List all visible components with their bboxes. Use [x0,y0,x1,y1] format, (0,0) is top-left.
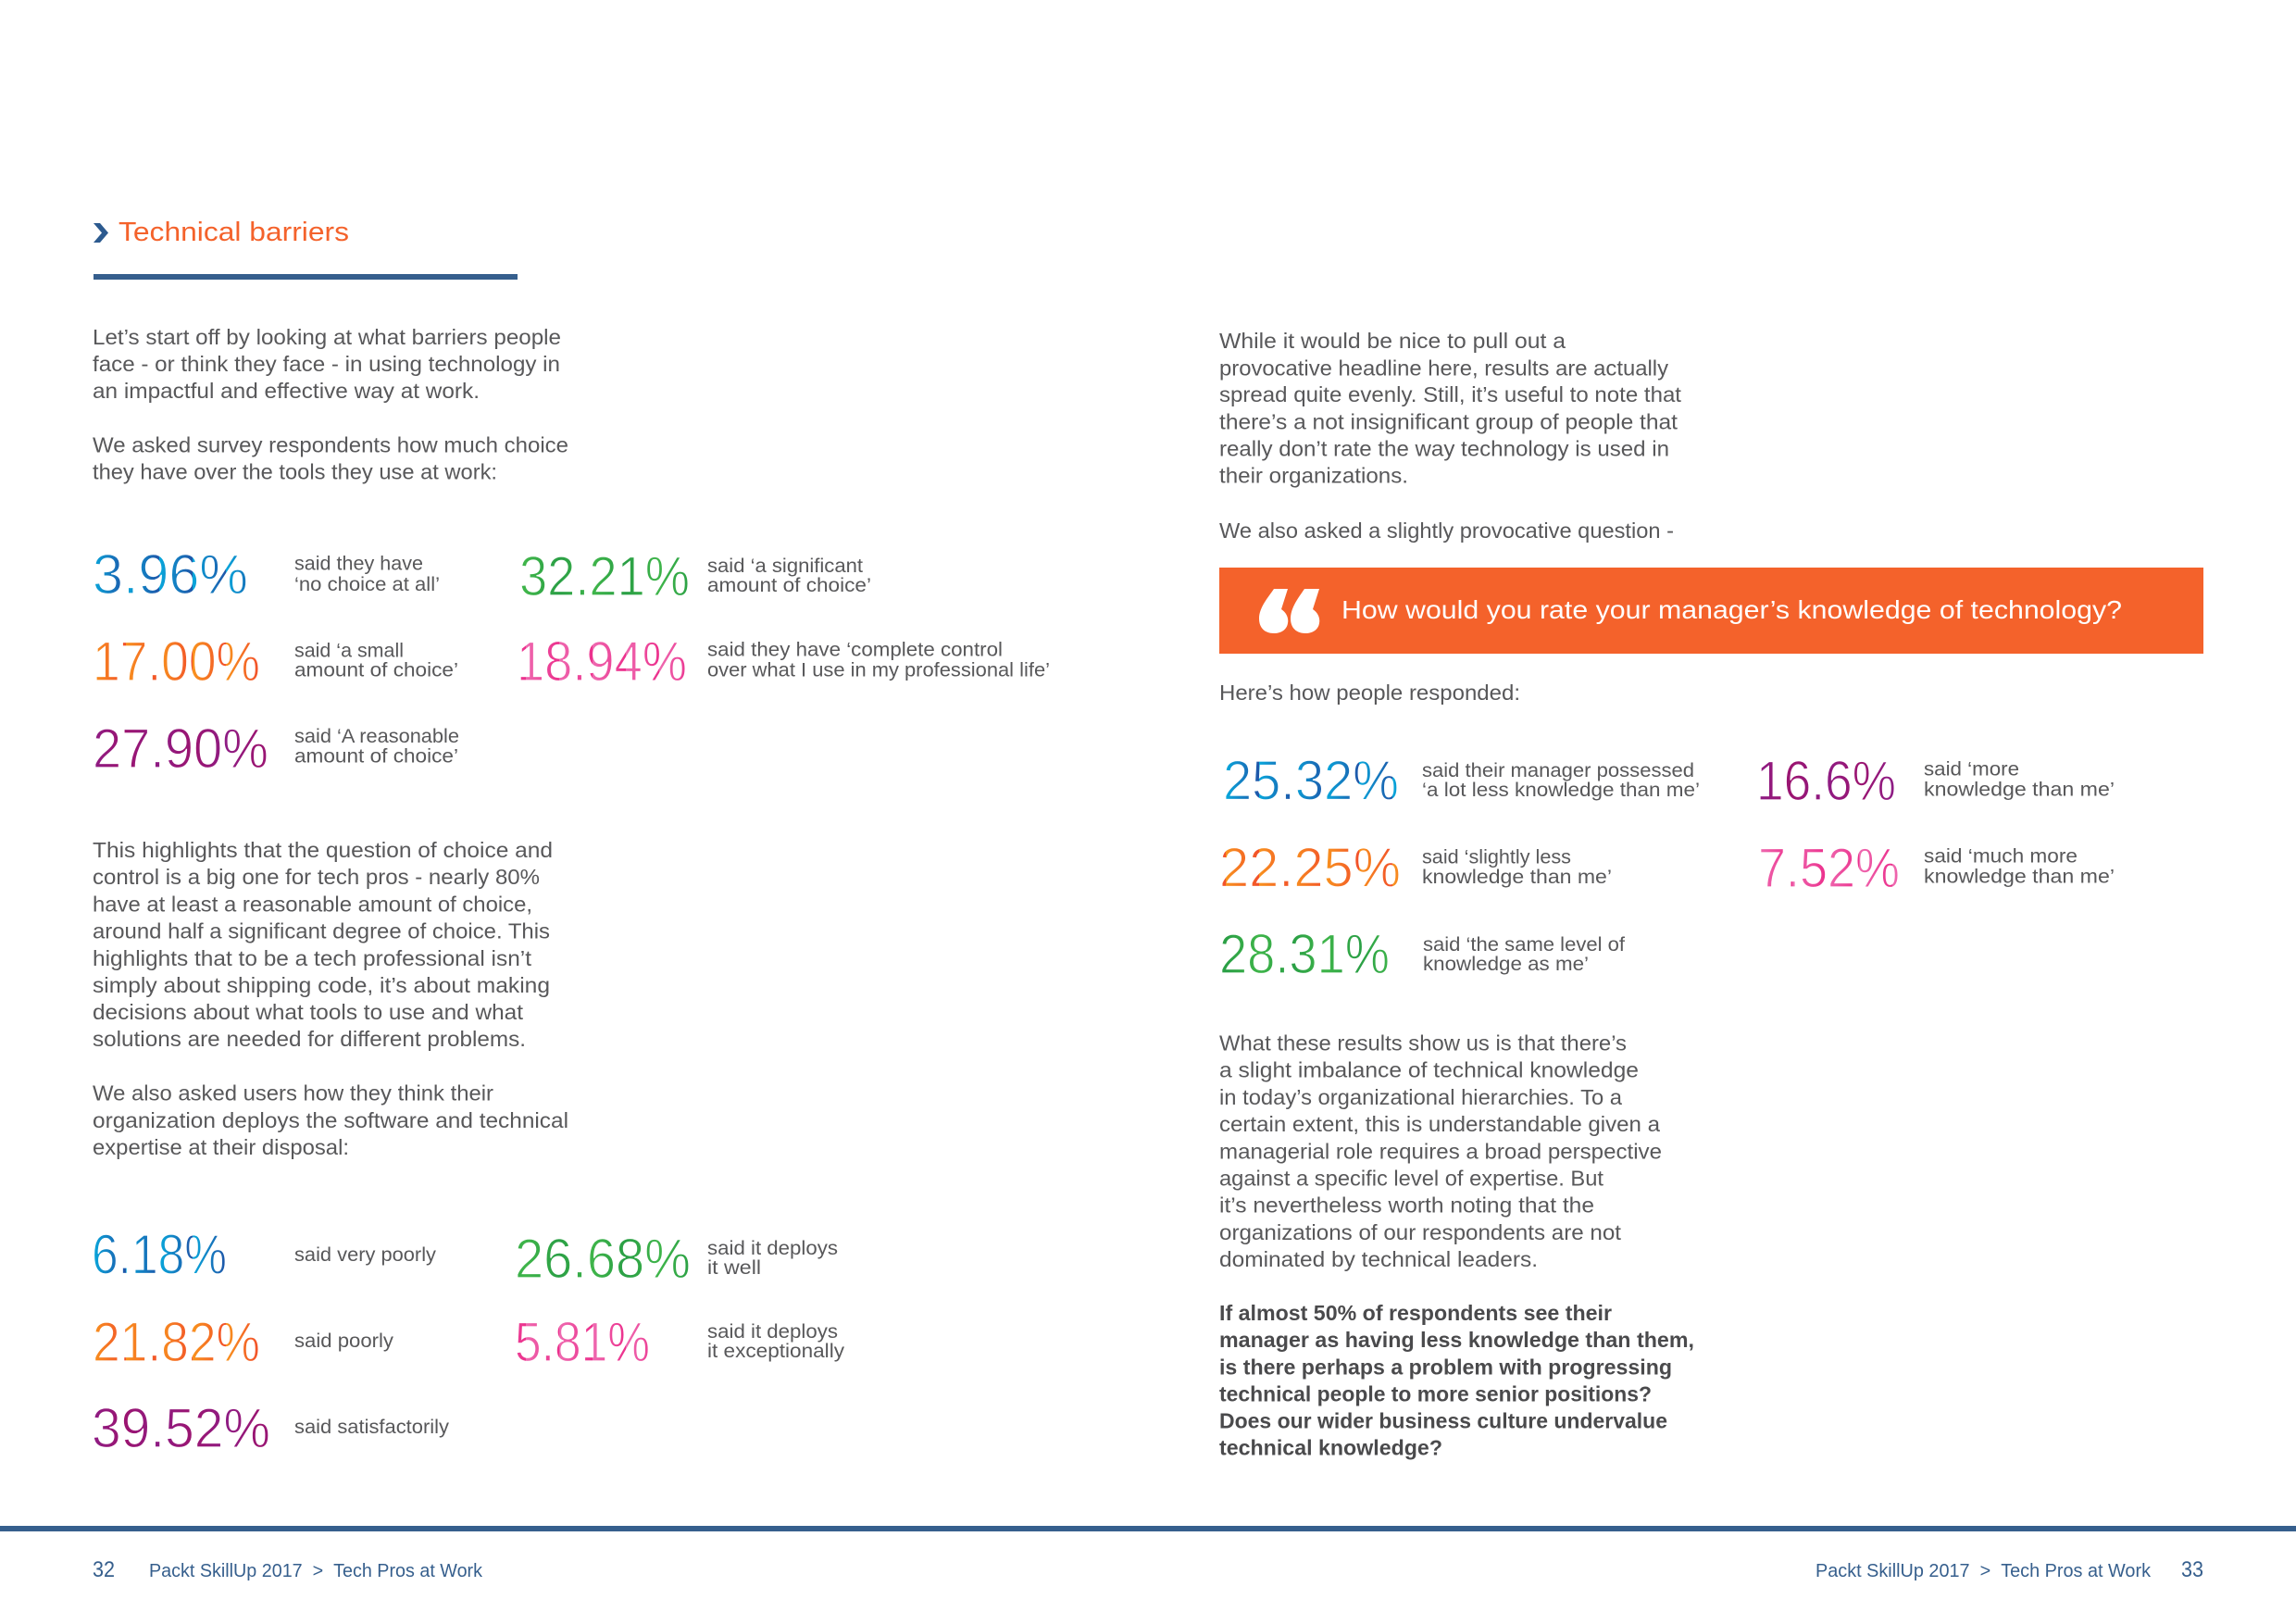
text block: right page introduction: spread quite evenly. Still, it’s useful to note that [1219,382,1681,406]
stat: 22.25% slightly less: knowledge than me’ [1422,866,1612,888]
text block: right page introduction: While it would be nice to pull out a [1219,329,1566,353]
footer rule [0,1526,2296,1531]
stat: 32.21% significant amount: amount of choice’ [707,574,871,596]
text block: right page introduction: there’s a not insignificant group of people that [1219,409,1678,433]
stat: 22.25% slightly less: 22.25% [1219,837,1401,898]
stat: 28.31% same level: said ‘the same level of [1423,933,1625,956]
stat: 27.90% reasonable amount: amount of choice’ [294,744,458,767]
footer right: page 33: 33 [2181,1557,2203,1582]
text block: introduction: We asked survey respondents how much choice [93,433,568,457]
text block: results analysis: organizations of our respondents are not [1219,1220,1621,1244]
stat: 5.81% exceptionally: said it deploys [707,1320,838,1343]
text block: choice analysis: decisions about what tools to use and what [93,1000,523,1024]
stat: 7.52% much more: said ‘much more [1924,844,2078,867]
icon: quotation mark [1259,589,1319,633]
stat: 3.96% no choice at all: said they have [294,552,423,574]
stat: 27.90% reasonable amount: 27.90% [93,718,268,780]
stat: 39.52% satisfactorily [92,1397,449,1459]
stat: 39.52% satisfactorily: said satisfactorily [294,1416,449,1438]
stat: 16.6% more: said ‘more [1924,757,2019,780]
text block: choice analysis: have at least a reasonable amount of choice, [93,893,532,917]
text block: right page introduction: really don’t rate the way technology is used in [1219,437,1669,461]
stat: 39.52% satisfactorily: 39.52% [92,1397,270,1459]
stat: 5.81% exceptionally: 5.81% [515,1311,650,1373]
text block: bold conclusion: manager as having less knowledge than them, [1219,1328,1694,1352]
stat: 32.21% significant amount [519,545,871,607]
stat: 22.25% slightly less: said ‘slightly less [1422,846,1571,868]
text block: choice analysis: solutions are needed for different problems. [93,1027,526,1051]
stat: 18.94% complete control: said they have ‘complete control [707,639,1003,661]
stat: 21.82% poorly: 21.82% [93,1311,260,1373]
text block: right page introduction: their organizations. [1219,463,1408,487]
stat group: choice over tools [93,543,1050,780]
stat: 26.68% well: 26.68% [515,1228,691,1290]
stat: 28.31% same level: 28.31% [1219,923,1390,985]
footer left: page 32 [93,1557,483,1582]
callout banner: manager question [1219,568,2203,654]
stat: 7.52% much more [1758,837,2115,899]
banner question text: How would you rate your manager’s knowledge of technology? [1341,595,2122,624]
text block: choice analysis: This highlights that the question of choice and [93,838,553,862]
stat: 5.81% exceptionally: it exceptionally [707,1340,844,1362]
stat: 28.31% same level [1219,923,1625,985]
stat: 3.96% no choice at all: ‘no choice at all’ [294,573,440,595]
text block: results analysis: managerial role requires a broad perspective [1219,1139,1662,1163]
stat: 6.18% very poorly: said very poorly [294,1243,436,1266]
text block: right page introduction: provocative headline here, results are actually [1219,356,1668,380]
stat: 21.82% poorly [93,1311,393,1373]
stat: 27.90% reasonable amount: said ‘A reasonable [294,725,459,747]
stat: 27.90% reasonable amount [93,718,459,780]
text block: results analysis: a slight imbalance of technical knowledge [1219,1058,1639,1082]
stat: 26.68% well: it well [707,1256,761,1279]
heading: Technical barriers: Technical barriers [119,218,349,247]
text block: bold conclusion [1219,1301,1694,1459]
stat: 26.68% well: said it deploys [707,1237,838,1259]
stat: 6.18% very poorly [92,1224,436,1285]
text block: responses lead-in: Here’s how people responded: [1219,681,1520,705]
text block: bold conclusion: technical people to more senior positions? [1219,1382,1652,1406]
stat: 21.82% poorly: said poorly [294,1330,393,1352]
stat: 32.21% significant amount: 32.21% [519,545,690,607]
footer right: page 33: Packt SkillUp 2017 > Tech Pros at Work [1816,1561,2152,1581]
stat: 18.94% complete control: 18.94% [517,631,687,693]
text block: results analysis: dominated by technical leaders. [1219,1247,1538,1271]
text block: bold conclusion: technical knowledge? [1219,1435,1442,1459]
stat: 25.32% a lot less: 25.32% [1223,750,1399,811]
stat: 17.00% small amount: said ‘a small [294,639,404,661]
stat: 17.00% small amount: 17.00% [93,631,260,693]
icon: section chevron [94,223,108,243]
footer left: page 32: 32 [93,1557,115,1582]
text block: results analysis: against a specific level of expertise. But [1219,1167,1603,1191]
text block: results analysis: certain extent, this is understandable given a [1219,1112,1661,1136]
stat: 7.52% much more: knowledge than me’ [1924,865,2115,887]
stat: 3.96% no choice at all: 3.96% [93,543,248,606]
text block: choice analysis: highlights that to be a tech professional isn’t [93,946,531,970]
text block: results analysis: in today’s organizational hierarchies. To a [1219,1085,1623,1109]
text block: choice analysis: around half a significant degree of choice. This [93,918,550,943]
text block: bold conclusion: is there perhaps a problem with progressing [1219,1355,1672,1379]
stat: 17.00% small amount: amount of choice’ [294,659,458,681]
text block: introduction: face - or think they face - in using technology in [93,352,560,376]
stat group: manager knowledge [1219,750,2115,985]
footer left: page 32: Packt SkillUp 2017 > Tech Pros at Work [149,1561,483,1581]
stat: 16.6% more [1756,750,2115,812]
stat: 16.6% more: knowledge than me’ [1924,778,2115,800]
stat: 28.31% same level: knowledge as me’ [1423,953,1589,975]
stat: 25.32% a lot less: ‘a lot less knowledge than me’ [1422,779,1700,801]
text block: results analysis [1219,1031,1662,1271]
text block: introduction: Let’s start off by looking at what barriers people [93,325,561,349]
stat: 6.18% very poorly: 6.18% [92,1224,227,1285]
text block: choice analysis: We also asked users how they think their [93,1081,493,1106]
stat: 3.96% no choice at all [93,543,440,606]
text block: choice analysis: expertise at their disposal: [93,1135,349,1159]
heading underline rule [94,274,518,280]
text block: choice analysis [93,838,568,1159]
stat group: organization deployment [92,1224,844,1459]
text block: choice analysis: simply about shipping code, it’s about making [93,973,550,997]
text block: introduction: they have over the tools they use at work: [93,459,497,483]
text block: bold conclusion: Does our wider business culture undervalue [1219,1409,1667,1433]
text block: introduction: an impactful and effective way at work. [93,379,480,403]
stat: 18.94% complete control [517,631,1050,693]
text block: right page introduction [1219,329,1681,543]
text block: right page introduction: We also asked a slightly provocative question - [1219,518,1674,543]
stat: 22.25% slightly less [1219,837,1612,898]
stat: 18.94% complete control: over what I use in my professional life’ [707,659,1050,681]
text block: bold conclusion: If almost 50% of respondents see their [1219,1301,1612,1325]
stat: 7.52% much more: 7.52% [1758,837,1900,899]
text block: choice analysis: control is a big one for tech pros - nearly 80% [93,865,540,889]
text block: results analysis: What these results show us is that there’s [1219,1031,1627,1056]
stat: 26.68% well [515,1228,838,1290]
stat: 25.32% a lot less: said their manager possessed [1422,759,1694,781]
stat: 32.21% significant amount: said ‘a significant [707,555,863,577]
stat: 5.81% exceptionally [515,1311,844,1373]
text block: introduction [93,325,568,483]
text block: results analysis: it’s nevertheless worth noting that the [1219,1193,1594,1218]
text block: choice analysis: organization deploys the software and technical [93,1108,568,1132]
stat: 25.32% a lot less [1223,750,1700,811]
stat: 16.6% more: 16.6% [1756,750,1896,812]
stat: 17.00% small amount [93,631,458,693]
